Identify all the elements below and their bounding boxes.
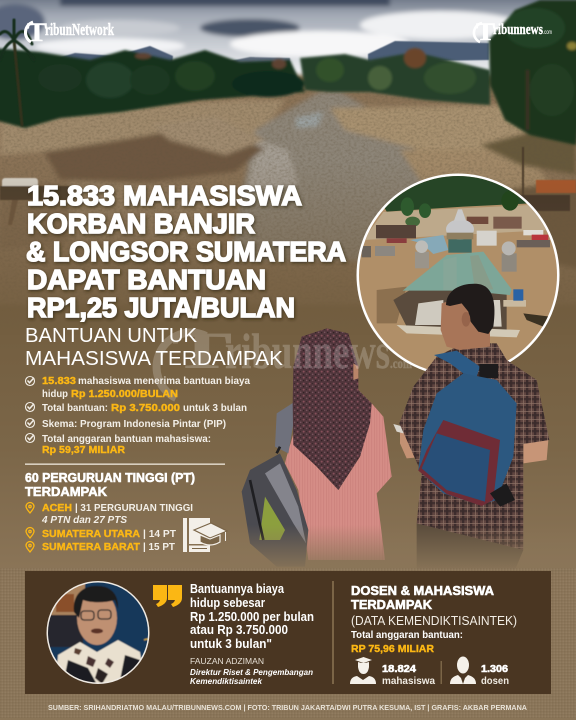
- bullet: total budget: Rp 59,37 MILIAR: [42, 444, 125, 456]
- region: Sumatera Utara: SUMATERA UTARA: [42, 528, 140, 540]
- icon: pin: [26, 502, 34, 513]
- debris texture: [0, 92, 576, 252]
- count: lecturers: 1.306: [481, 663, 508, 675]
- backpack: [434, 351, 480, 377]
- region: Sumatera Barat: SUMATERA BARAT: [42, 541, 141, 553]
- speaker portrait: [46, 581, 150, 684]
- bullet: total budget: Total anggaran bantuan mahasiswa:: [42, 433, 211, 445]
- quote text: Bantuannya biaya: [190, 582, 285, 596]
- title: RP1,25 JUTA/BULAN: [27, 292, 295, 323]
- illustration: two students seen from behind: [242, 284, 549, 570]
- logo: Tribun Network: [25, 18, 114, 47]
- icon: pin: [26, 542, 34, 552]
- logo: Tribunnews: .com: [543, 30, 552, 36]
- bullet: 15.833 students: hidup: [42, 388, 68, 400]
- building under roof: [393, 290, 507, 330]
- watermark: .com: [390, 357, 412, 372]
- far tree line: [384, 176, 526, 212]
- count: students: [382, 663, 435, 687]
- logo: Tribun Network: T: [27, 18, 47, 47]
- bullet: total budget: [42, 433, 211, 456]
- face and hair: [77, 591, 117, 645]
- total budget: Total anggaran bantuan:: [351, 630, 463, 641]
- lecturer and student data: [350, 583, 517, 687]
- total budget: RP 75,96 MILIAR: [351, 643, 434, 655]
- section heading: 60 PERGURUAN TINGGI (PT): [25, 470, 195, 485]
- student with hijab and backpack: [242, 328, 392, 567]
- region: Aceh: 4 PTN dan 27 PTS: [41, 514, 127, 526]
- bullet: total aid: untuk 3 bulan: [183, 402, 247, 414]
- large trees right: [489, 0, 576, 145]
- speaker credit: FAUZAN ADZIMAN: [190, 656, 264, 666]
- subtitle: MAHASISWA TERDAMPAK: [25, 348, 284, 370]
- total budget: [351, 630, 463, 655]
- icon: pin: [26, 528, 34, 538]
- quote text: hidup sebesar: [190, 596, 265, 610]
- region: Aceh: [41, 502, 193, 526]
- subtitle: BANTUAN UNTUK: [25, 325, 198, 347]
- main dome: [448, 237, 472, 253]
- logo: Tribunnews: [474, 19, 552, 46]
- count: students: 18.824: [382, 663, 416, 675]
- section heading: [25, 470, 195, 499]
- title: DAPAT BANTUAN: [27, 264, 266, 295]
- student in plaid shirt with backpack: [393, 284, 549, 570]
- quote text: atau Rp 3.750.000: [190, 623, 288, 637]
- section heading: TERDAMPAK: [25, 484, 108, 499]
- mountains: [62, 40, 490, 64]
- bullet: total aid: Total bantuan:: [42, 402, 108, 414]
- data heading: [351, 583, 495, 612]
- title: 15.833 MAHASISWA: [27, 180, 302, 211]
- subtitle: [25, 325, 284, 370]
- bullet: total aid: Rp 3.750.000: [111, 402, 180, 414]
- watermark: [157, 323, 412, 398]
- photo fade overlay: [0, 160, 576, 335]
- icon: check: [26, 434, 34, 442]
- bullet: 15.833 students: Rp 1.250.000/BULAN: [71, 388, 178, 400]
- bullet: scheme: Skema: Program Indonesia Pintar (PIP): [42, 418, 226, 430]
- circular photo: mosque damaged by flood: [356, 174, 560, 371]
- muddy ground and river: [0, 87, 576, 283]
- watermark: ribunnews: [225, 323, 390, 379]
- data heading: TERDAMPAK: [351, 597, 433, 612]
- speaker credit: Kemendiktisaintek: [190, 677, 263, 686]
- palm tree left: [0, 20, 34, 125]
- sky and clouds: [0, 0, 576, 75]
- mosque roof: [403, 252, 512, 295]
- footer credits: SUMBER: SRIHANDRIATMO MALAU/TRIBUNNEWS.COM | FOTO: TRIBUN JAKARTA/DWI PUTRA KESUMA, IST | GRAFIS: AKBAR PERMANA: [48, 705, 527, 712]
- speaker credit: [190, 656, 313, 686]
- region: Sumatera Utara: | 14 PT: [143, 528, 177, 540]
- logo: Tribunnews: T: [476, 19, 495, 46]
- icon: check: [26, 376, 34, 386]
- quote text: Rp 1.250.000 per bulan: [190, 610, 314, 624]
- houses: [376, 225, 416, 238]
- title: & LONGSOR SUMATERA: [26, 236, 346, 267]
- ground shade: [377, 287, 407, 323]
- bullet: 15.833 students: [42, 375, 250, 400]
- title: [26, 180, 346, 323]
- data heading: DOSEN & MAHASISWA: [351, 583, 495, 598]
- speaker credit: Direktur Riset & Pengembangan: [190, 668, 313, 677]
- quote text: [190, 582, 314, 651]
- cars: [477, 231, 497, 246]
- panel: quote and lecturer data: [25, 571, 551, 694]
- count: lecturers: dosen: [481, 675, 509, 687]
- bullet: total aid: [42, 402, 247, 414]
- batik shirt: [56, 639, 142, 682]
- section: 60 affected universities: [25, 470, 227, 553]
- data source: (DATA KEMENDIKTISAINTEK): [351, 613, 517, 628]
- icon: lecturer: [450, 656, 476, 684]
- icon: book and graduation cap: [183, 518, 227, 552]
- head: [441, 297, 490, 350]
- tree line with oil palms: [0, 48, 490, 128]
- people, cars and structures on the debris: [0, 147, 576, 225]
- bullet: 15.833 students: 15.833: [42, 375, 76, 387]
- region: Aceh: ACEH: [42, 502, 72, 514]
- quote text: untuk 3 bulan": [190, 637, 272, 651]
- bullet list: aid details: [26, 375, 250, 456]
- icon: check: [26, 402, 34, 412]
- logo: Tribun Network: ribunNetwork: [45, 20, 114, 39]
- icon: student: [350, 657, 376, 684]
- region: Aceh: | 31 PERGURUAN TINGGI: [75, 502, 193, 514]
- icon: check: [26, 418, 34, 428]
- count: students: mahasiswa: [382, 675, 435, 687]
- fade under students: [230, 525, 576, 572]
- bullet: 15.833 students: mahasiswa menerima bantuan biaya: [78, 375, 250, 387]
- title: KORBAN BANJIR: [27, 208, 255, 239]
- region: Sumatera Barat: | 15 PT: [143, 541, 176, 553]
- minarets: [415, 252, 429, 268]
- header photo: flood-ravaged river valley: [0, 0, 576, 283]
- logo: Tribunnews: ribunnews: [493, 22, 543, 38]
- count: lecturers: [481, 663, 509, 687]
- watermark: T: [172, 323, 232, 380]
- quote marks: [153, 585, 182, 607]
